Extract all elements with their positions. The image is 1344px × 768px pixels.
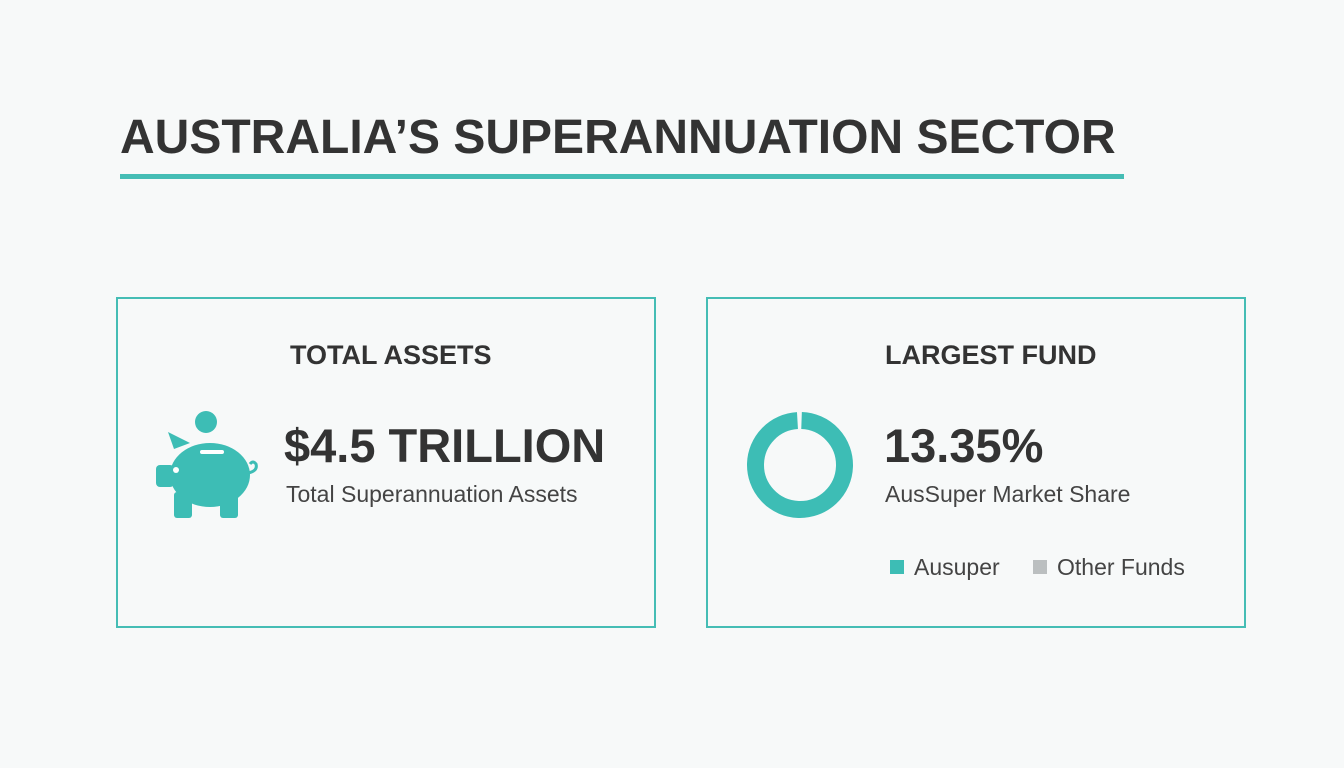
icon: piggy bank bbox=[156, 411, 258, 518]
legend bbox=[890, 554, 1185, 580]
subtitle: Total Superannuation Assets bbox=[286, 481, 578, 507]
title underline bbox=[120, 174, 1124, 179]
subtitle: AusSuper Market Share bbox=[885, 481, 1130, 507]
panel: total assets bbox=[116, 297, 656, 628]
panel: largest fund bbox=[706, 297, 1246, 628]
big value: 13.35% bbox=[884, 419, 1043, 472]
big value: $4.5 TRILLION bbox=[284, 419, 605, 472]
donut chart bbox=[747, 412, 853, 518]
heading: total assets: TOTAL ASSETS bbox=[290, 340, 492, 370]
title: AUSTRALIA’S SUPERANNUATION SECTOR bbox=[120, 111, 1116, 164]
legend: Other Funds bbox=[1057, 554, 1185, 580]
heading: largest fund: LARGEST FUND bbox=[885, 340, 1096, 370]
legend: Ausuper bbox=[914, 554, 1000, 580]
